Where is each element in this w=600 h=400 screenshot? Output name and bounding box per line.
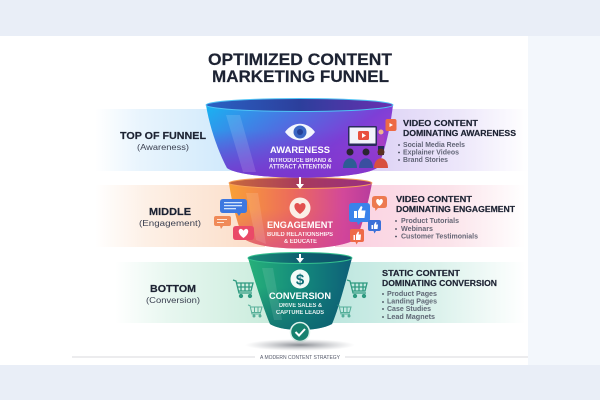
- panel: video content awareness: [350, 109, 528, 171]
- panel: static content conversion: STATIC CONTENT: [382, 268, 461, 278]
- conversion label: CAPTURE LEADS: [276, 310, 324, 316]
- conversion label: CONVERSION: [269, 291, 331, 302]
- panel: video content engagement: VIDEO CONTENT: [396, 194, 473, 204]
- panel: bottom label band: BOTTOM: [150, 283, 196, 295]
- icon: eye: [285, 124, 315, 140]
- panel: middle label band: MIDDLE: [149, 206, 191, 218]
- icons: shopping carts: [233, 280, 367, 317]
- panel: video content engagement: DOMINATING ENGAGEMENT: [396, 204, 516, 214]
- funnel tier: conversion: [248, 252, 352, 330]
- panel: video content engagement: Webinars: [401, 224, 433, 233]
- panel: video content awareness: Explainer Videos: [403, 148, 459, 156]
- panel: static content conversion: DOMINATING CONVERSION: [382, 278, 497, 288]
- title: [208, 51, 392, 86]
- awareness label: AWARENESS: [270, 145, 330, 156]
- icons: engagement right bubbles: [349, 196, 387, 244]
- icon: heart: [290, 198, 310, 218]
- icon: cart large left: [233, 280, 253, 298]
- footer tagline: A MODERN CONTENT STRATEGY: [260, 355, 340, 361]
- panel: top of funnel label band: [95, 109, 250, 171]
- engagement label: [267, 220, 333, 245]
- panel: video content awareness: Brand Stories: [403, 155, 448, 164]
- engagement label: BUILD RELATIONSHIPS: [267, 232, 333, 238]
- icon: video presentation: [343, 119, 396, 168]
- icon: cart small right: [337, 305, 351, 317]
- panel: middle label band: [95, 185, 265, 247]
- funnel tier: engagement: [229, 178, 372, 248]
- panel: top of funnel label band: (Awareness): [137, 143, 189, 152]
- icon: cart small left: [248, 305, 262, 317]
- panel: static content conversion: Landing Pages: [387, 296, 437, 306]
- panel: top of funnel label band: TOP OF FUNNEL: [120, 130, 207, 142]
- panel: static content conversion: Case Studies: [387, 304, 431, 313]
- funnel ground shadow: [245, 339, 355, 351]
- panel: static content conversion: [310, 262, 525, 323]
- panel: static content conversion: Lead Magnets: [387, 312, 435, 321]
- panel: static content conversion: Product Pages: [387, 289, 437, 298]
- engagement label: ENGAGEMENT: [267, 220, 333, 231]
- icon: check badge: [290, 322, 310, 342]
- icon: cart large right: [347, 280, 367, 298]
- panel: video content awareness: DOMINATING AWARENESS: [403, 128, 516, 138]
- title: MARKETING FUNNEL: [212, 68, 389, 86]
- title: OPTIMIZED CONTENT: [208, 51, 392, 69]
- icon: dollar: $: [296, 272, 305, 288]
- panel: video content awareness: VIDEO CONTENT: [403, 118, 479, 128]
- panel: video content engagement: [335, 185, 525, 247]
- conversion label: DRIVE SALES &: [279, 303, 323, 309]
- panel: video content engagement: Customer Testimonials: [401, 232, 478, 240]
- awareness label: ATTRACT ATTENTION: [269, 164, 331, 170]
- panel: video content engagement: Product Tutorials: [401, 216, 459, 225]
- awareness label: INTRODUCE BRAND &: [269, 158, 333, 164]
- panel: bottom label band: (Conversion): [146, 296, 200, 305]
- engagement label: & EDUCATE: [284, 239, 317, 245]
- panel: middle label band: (Engagement): [139, 219, 201, 228]
- awareness label: [269, 145, 333, 170]
- conversion label: [269, 291, 331, 316]
- arrow: awareness to engagement: [296, 177, 304, 189]
- arrow: engagement to conversion: [296, 254, 304, 263]
- panel: bottom label band: [115, 262, 290, 323]
- panel: video content awareness: Social Media Reels: [403, 140, 465, 149]
- funnel tier: awareness: [206, 98, 396, 178]
- icons: engagement left bubbles: [214, 199, 254, 240]
